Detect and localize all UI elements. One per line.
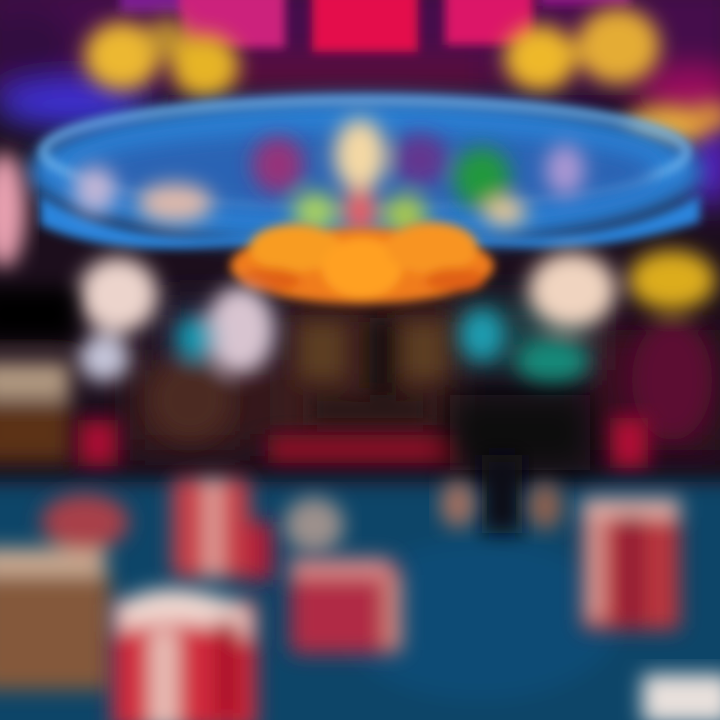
ring highlight	[43, 100, 687, 204]
figures on the ring	[73, 119, 585, 236]
blue floor	[0, 482, 720, 720]
dark figure standing on floor	[440, 395, 590, 533]
lower ring glow	[40, 195, 700, 249]
white box bottom right	[642, 674, 720, 720]
ceiling: purple backdrop	[0, 0, 720, 210]
left edge figure	[0, 152, 26, 268]
ring inner	[75, 132, 655, 212]
left bar counter	[0, 288, 75, 462]
gift box: red and white centre-left	[172, 478, 273, 580]
gift box: brown stack left	[0, 494, 129, 690]
side figures	[78, 250, 716, 440]
red carpet band	[78, 418, 648, 468]
blue ring stage	[27, 96, 703, 249]
mid-room warm and teal tones	[130, 300, 720, 450]
orange dome	[230, 222, 494, 304]
ceiling: yellow lights	[84, 8, 720, 145]
gift box: small cream	[284, 497, 344, 553]
central machine	[298, 318, 446, 425]
gift box: red right	[582, 498, 680, 630]
ceiling: magenta and red panels	[120, 0, 630, 52]
gift box: large front striped	[112, 589, 257, 720]
gift box: red front centre	[290, 558, 402, 654]
ring body	[27, 96, 703, 248]
